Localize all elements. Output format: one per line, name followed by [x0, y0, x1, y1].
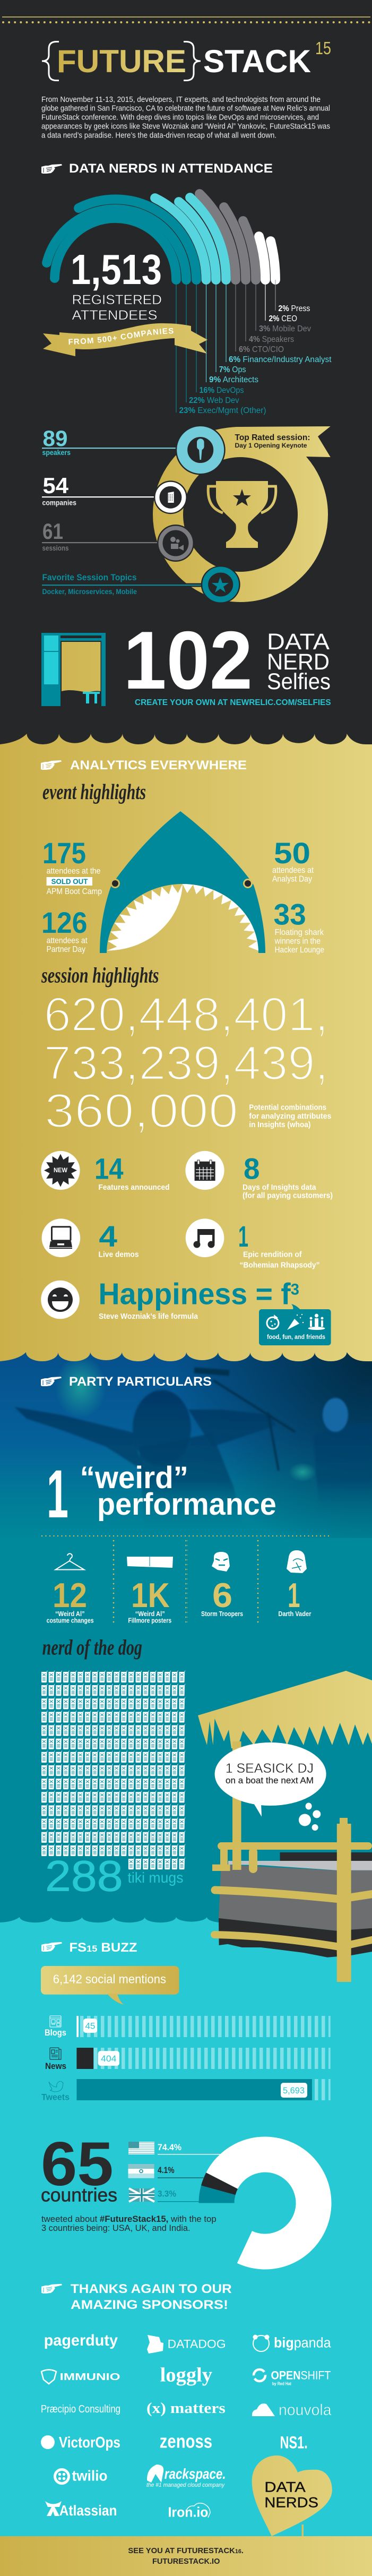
panel: party particulars concert photo	[0, 1349, 372, 1543]
subheading: session highlights: session highlights	[41, 963, 159, 988]
icon: newspaper	[50, 2048, 61, 2059]
logo: loggly: loggly	[160, 2364, 212, 2386]
speech bubble: seasick DJ	[215, 1742, 326, 1817]
footer	[0, 2536, 372, 2576]
stat: 61 sessions: sessions	[42, 544, 69, 552]
stat: 175 attendees: attendees at the	[47, 867, 101, 876]
icon: storm trooper helmet	[212, 1552, 230, 1572]
gold circular arrow	[168, 426, 331, 587]
stat: 6 storm troopers: Storm Troopers	[201, 1610, 243, 1618]
stat: 1K fillmore posters: “Weird Al”	[135, 1610, 165, 1618]
logo: twilio	[55, 2468, 107, 2484]
ribbon: from 500+ companies: FROM 500+ COMPANIES	[68, 328, 174, 345]
shark teeth	[107, 884, 258, 950]
bar chart: social mentions	[41, 2016, 331, 2102]
icon: pizza	[267, 1315, 279, 1329]
background: dark section	[0, 0, 372, 743]
big number: potential combinations	[44, 989, 328, 1138]
intro paragraph: globe gathered in San Francisco, CA to celebrate the future of software at New Relic’s annual	[41, 104, 330, 113]
chart: 288 tiki mugs pictogram: tiki mugs	[127, 1869, 184, 1886]
logo: nouvola: nouvola	[279, 2401, 332, 2419]
stat: 50 attendees: attendees at	[272, 866, 314, 875]
boat hull	[219, 1865, 372, 1931]
scalloped gold edge	[0, 1349, 372, 1361]
headline: 1 weird performance: performance	[97, 1487, 276, 1522]
panel: session stats with trophy ring	[42, 425, 331, 603]
big number: potential combinations: 360,000	[45, 1085, 238, 1138]
title: FutureStack 15 logo	[42, 38, 331, 81]
icon: UK flag	[129, 2188, 154, 2202]
chart: 288 tiki mugs pictogram: 288	[45, 1852, 123, 1901]
sick bubbles	[299, 1803, 321, 1831]
logo: xmatters: (x) matters	[146, 2400, 226, 2417]
subheading: nerd of the dog: nerd of the dog	[42, 1635, 142, 1660]
heading: thanks to sponsors: THANKS AGAIN TO OUR	[71, 2282, 232, 2296]
chart labels: 2% CEO	[269, 314, 297, 323]
icon: blog window	[50, 2016, 61, 2027]
chart leader lines	[176, 280, 275, 413]
heading: thanks to sponsors: AMAZING SPONSORS!	[71, 2298, 228, 2312]
illustration: shark	[100, 811, 265, 953]
stat: happiness formula: Steve Wozniak’s life formula	[99, 1312, 198, 1321]
text: tweeted about: tweeted about #FutureStack15, with the top	[41, 2214, 217, 2224]
icon: US flag	[128, 2142, 154, 2154]
stat: 12 costume changes: costume changes	[47, 1617, 94, 1625]
callout: food, fun, and friends: food, fun, and friends	[267, 1334, 325, 1341]
caption: potential combinations: for analyzing attributes	[249, 1112, 331, 1121]
stat: 126 attendees	[41, 906, 88, 954]
stat: 54 companies	[42, 473, 187, 514]
intro paragraph: From November 11-13, 2015, developers, IT experts, and technologists from around the	[41, 96, 321, 104]
bar: news 404: 404	[101, 2054, 117, 2064]
bar: blogs 45: Blogs	[45, 2028, 66, 2038]
panel: data nerd selfies: 102	[123, 614, 253, 706]
stat: 54 companies: companies	[42, 498, 76, 506]
favourite session topics: Docker, Microservices, Mobile	[42, 587, 137, 596]
stat: 1,513 registered attendees: REGISTERED	[72, 293, 162, 307]
stat: 1K fillmore posters: Fillmore posters	[128, 1617, 171, 1625]
panel: data nerd selfies: DATA	[267, 629, 330, 655]
stat: 126 attendees: 126	[41, 906, 87, 939]
logo: nouvola	[252, 2401, 332, 2419]
headline: 1 weird performance	[47, 1456, 276, 1532]
title: FutureStack 15 logo: FUTURE	[57, 44, 186, 79]
caption: potential combinations: Potential combinations	[249, 1103, 326, 1112]
icon: friends	[308, 1313, 325, 1330]
stat: 8 days of insights data	[185, 1151, 333, 1200]
stat: 1K fillmore posters: 1K	[131, 1576, 170, 1615]
stat: 1K fillmore posters	[127, 1557, 173, 1625]
logo: openshift	[254, 2369, 331, 2386]
intro paragraph: appearances by geek icons like Steve Wozniak and “Weird Al” Yankovic, FutureStack15 was	[41, 122, 330, 131]
heading: FS15 buzz	[41, 1940, 137, 1955]
stat: 1 darth vader: Darth Vader	[278, 1610, 311, 1618]
icon: pointing hand	[41, 1942, 62, 1952]
callout: food, fun, and friends	[259, 1304, 331, 1345]
intro paragraph: FutureStack conference. With deep dives into topics like DevOps and microservices, and	[41, 114, 319, 122]
stat: 65 countries: 65	[41, 2129, 114, 2199]
icon: India flag	[128, 2164, 154, 2178]
heading: data nerds in attendance: DATA NERDS IN ATTENDANCE	[69, 161, 273, 176]
stat: 14 features announced	[41, 1151, 170, 1192]
chart labels: 4% Speakers	[249, 335, 294, 344]
icon: pointing hand	[41, 164, 62, 174]
logo: immunio	[41, 2370, 120, 2384]
logo: rackspace	[146, 2465, 226, 2488]
stat: 50 attendees: 50	[274, 836, 310, 870]
donut chart: tweets by country	[198, 2136, 331, 2269]
footer: FUTURESTACK.IO	[152, 2557, 220, 2566]
caption: potential combinations	[249, 1103, 331, 1129]
trophy icon	[208, 481, 276, 548]
bar: news 404	[45, 2048, 331, 2071]
cyan background with scallops	[0, 1914, 372, 2536]
photo: microphone stand	[194, 1370, 295, 1471]
logo: rackspace: rackspace.	[165, 2466, 226, 2482]
logo: bigpanda: bigpanda	[274, 2335, 332, 2351]
logo: datadog	[147, 2335, 226, 2354]
heading: party particulars: PARTY PARTICULARS	[69, 1375, 212, 1389]
stat: 14 features announced: 14	[94, 1152, 123, 1186]
panel: data nerd selfies: Selfies	[267, 669, 331, 694]
chart: 288 tiki mugs pictogram	[41, 1670, 186, 1901]
panel: data nerd selfies	[41, 614, 331, 707]
intro paragraph: a data nerd’s paradise. Here’s the data-driven recap of what all went down.	[41, 132, 276, 140]
logo: victorops: VictorOps	[59, 2434, 120, 2451]
stat: happiness formula	[41, 1277, 299, 1321]
logo: pagerduty: pagerduty	[44, 2332, 118, 2349]
caption: potential combinations: in Insights (whoa)	[249, 1120, 310, 1129]
stat: 1,513 registered attendees: 1,513	[71, 246, 162, 293]
legend: India	[128, 2164, 204, 2178]
text: tweeted about: 3 countries being: USA, UK, and India.	[41, 2223, 190, 2233]
bar: tweets 5,693: 5,693	[283, 2085, 305, 2096]
logo: bigpanda	[253, 2335, 332, 2351]
bar: blogs 45	[45, 2016, 331, 2038]
icon: darth vader helmet	[287, 1550, 307, 1573]
stat: 4 live demos: 4	[99, 1220, 117, 1253]
stat: 54 companies: 54	[42, 473, 69, 498]
stat: 8 days of insights data: Days of Insights data	[243, 1183, 316, 1192]
logo: immunio: IMMUNIO	[60, 2372, 120, 2382]
stat: 126 attendees: Partner Day	[47, 945, 85, 954]
icon: pointing hand	[41, 760, 62, 770]
stat: 8 days of insights data: (for all paying customers)	[243, 1191, 333, 1200]
stat: 175 attendees: 175	[42, 836, 86, 870]
stat: 65 countries: countries	[41, 2184, 117, 2206]
stat: 14 features announced: NEW	[54, 1167, 67, 1174]
stat: 1 bohemian rhapsody: Epic rendition of	[243, 1250, 302, 1259]
stat: 89 speakers: 89	[42, 426, 68, 451]
boat rails and posts	[212, 1741, 372, 1982]
callout: top rated session: Day 1 Opening Keynote	[235, 442, 307, 449]
stat: 61 sessions	[42, 519, 194, 562]
callout: 6,142 social mentions	[41, 1966, 179, 2005]
logo: atlassian	[45, 2501, 117, 2519]
stat: 14 features announced: Features announced	[99, 1183, 170, 1192]
panel: data nerd selfies: NERD	[267, 649, 330, 675]
favourite session topics: Favorite Session Topics	[42, 572, 137, 582]
chart labels: 6% CTO/CIO	[239, 345, 284, 354]
stat: 126 attendees: attendees at	[47, 937, 88, 946]
chart labels: 23% Exec/Mgmt (Other)	[179, 406, 266, 415]
title: FutureStack 15 logo: STACK	[203, 44, 311, 79]
stat: happiness formula: 3	[291, 1281, 299, 1299]
icon: pointing hand	[41, 2284, 62, 2294]
stat: 175 attendees	[42, 836, 102, 896]
callout: top rated session	[235, 433, 310, 449]
stat: 12 costume changes: “Weird Al”	[55, 1610, 85, 1618]
illustration: tiki boat	[198, 1671, 372, 1982]
stat: 175 attendees: APM Boot Camp	[47, 887, 102, 896]
title: FutureStack 15 logo: 15	[315, 38, 331, 58]
logo: praecipio consulting: Præcipio Consulting	[41, 2403, 120, 2415]
chart labels: 2% Press	[278, 304, 310, 313]
stat: 1,513 registered attendees: ATTENDEES	[72, 308, 157, 323]
logo: atlassian: Atlassian	[59, 2502, 117, 2519]
big number: potential combinations: 620,448,401,	[44, 989, 328, 1042]
callout: 6,142 social mentions: 6,142 social mentions	[53, 1972, 166, 1986]
chart labels: 6% Finance/Industry Analyst	[229, 355, 332, 364]
panel: sponsor logos	[41, 2332, 332, 2520]
bar: tweets 5,693	[41, 2079, 331, 2102]
legend: USA: 74.4%	[158, 2142, 181, 2152]
teal background	[0, 1542, 372, 1918]
bar: news 404: News	[45, 2061, 66, 2071]
heading: analytics everywhere: ANALYTICS EVERYWHERE	[70, 758, 247, 772]
stat: 1 bohemian rhapsody: “Bohemian Rhapsody”	[240, 1261, 319, 1270]
stat: 4 live demos: Live demos	[99, 1250, 139, 1259]
footer: SEE YOU AT FUTURESTACK16.	[128, 2546, 244, 2555]
heading: thanks to sponsors	[41, 2282, 232, 2312]
callout: top rated session: Top Rated session:	[235, 433, 310, 442]
bar: blogs 45: 45	[85, 2021, 96, 2031]
panel: analytics everywhere (gold)	[0, 727, 372, 1361]
dotted dividers	[41, 1535, 332, 1626]
stat: 1,513 registered attendees	[71, 246, 162, 323]
stat: 12 costume changes	[47, 1553, 94, 1625]
logo: openshift: OPENSHIFT	[271, 2369, 331, 2382]
stat: 33 shark winners: Floating shark	[275, 928, 324, 937]
logo: victorops	[41, 2434, 120, 2451]
chart labels: 9% Architects	[209, 375, 258, 384]
stat: 4 live demos	[42, 1218, 139, 1259]
legend: UK: 3.3%	[158, 2189, 176, 2199]
chart labels	[179, 304, 332, 415]
speech bubble: seasick DJ: 1 SEASICK DJ	[226, 1761, 314, 1776]
chart: attendee rainbow arcs	[47, 194, 275, 280]
headline: 1 weird performance: 1	[47, 1456, 68, 1532]
stat: 33 shark winners	[274, 898, 324, 955]
stat: 1 bohemian rhapsody	[186, 1218, 319, 1270]
ribbon: from 500+ companies	[43, 323, 207, 356]
decorative top rule and dots	[0, 16, 372, 23]
intro paragraph	[41, 96, 330, 140]
logo: zenoss: zenoss	[160, 2431, 212, 2452]
logo: openshift: by Red Hat	[272, 2381, 291, 2386]
heading: FS15 buzz: FS15 BUZZ	[69, 1940, 137, 1955]
big number: potential combinations: 733,239,439,	[44, 1037, 328, 1090]
icon: party popper	[287, 1314, 304, 1330]
subheading: event highlights: event highlights	[42, 779, 146, 804]
chart labels: 22% Web Dev	[189, 396, 239, 405]
stat: 50 attendees	[272, 836, 314, 884]
stat: 8 days of insights data: 8	[244, 1152, 260, 1186]
stat: 1 darth vader: 1	[288, 1576, 300, 1615]
text: tweeted about	[41, 2214, 217, 2233]
logo: datadog: DATADOG	[168, 2338, 226, 2351]
legend: UK	[129, 2188, 200, 2202]
stat: 33 shark winners: 33	[274, 898, 306, 931]
heart: data nerds: NERDS	[264, 2494, 318, 2510]
icon: rolled poster	[127, 1557, 173, 1568]
favourite session topics	[42, 566, 240, 603]
tiki roof	[198, 1671, 372, 1748]
stat: 175 attendees: SOLD OUT	[51, 878, 88, 886]
stat: 89 speakers: speakers	[42, 448, 71, 457]
headline: 1 weird performance: “weird”	[80, 1461, 188, 1495]
panel: data nerd selfies: CREATE YOUR OWN AT NEWRELIC.COM/SELFIES	[135, 698, 331, 707]
icon: hanger	[55, 1553, 84, 1569]
legend: USA	[128, 2142, 221, 2154]
heart: data nerds: DATA	[264, 2479, 306, 2495]
icon: photo booth	[41, 633, 106, 706]
chart labels: 7% Ops	[219, 365, 246, 374]
stat: 1 darth vader	[278, 1550, 311, 1618]
speech bubble: seasick DJ: on a boat the next AM	[226, 1775, 314, 1785]
legend: India: 4.1%	[158, 2165, 175, 2175]
stat: 61 sessions: 61	[42, 519, 63, 544]
stat: 1 bohemian rhapsody: 1	[238, 1220, 248, 1253]
heart: data nerds	[252, 2455, 332, 2537]
logo: rackspace: the #1 managed cloud company	[146, 2482, 225, 2488]
logo: iron.io: Iron.io	[168, 2504, 208, 2520]
stat: 33 shark winners: winners in the	[274, 937, 321, 946]
icon: pointing hand	[41, 1377, 62, 1386]
stat: 6 storm troopers	[201, 1552, 243, 1618]
stat: 50 attendees: Analyst Day	[272, 875, 312, 884]
stat: 12 costume changes: 12	[53, 1576, 87, 1615]
logo: twilio: twilio	[72, 2468, 107, 2484]
bar: tweets 5,693: Tweets	[41, 2092, 70, 2102]
logo: NS1: NS1.	[280, 2433, 308, 2452]
chart labels: 16% DevOps	[200, 386, 244, 395]
photo: performer silhouette	[14, 1390, 372, 1534]
stat: 89 speakers	[42, 425, 226, 475]
stat: 33 shark winners: Hacker Lounge	[275, 946, 324, 955]
stat: 6 storm troopers: 6	[212, 1576, 232, 1615]
chart labels: 3% Mobile Dev	[259, 324, 311, 333]
stat: happiness formula: Happiness = f	[99, 1277, 296, 1311]
icon: twitter bird	[49, 2081, 63, 2092]
